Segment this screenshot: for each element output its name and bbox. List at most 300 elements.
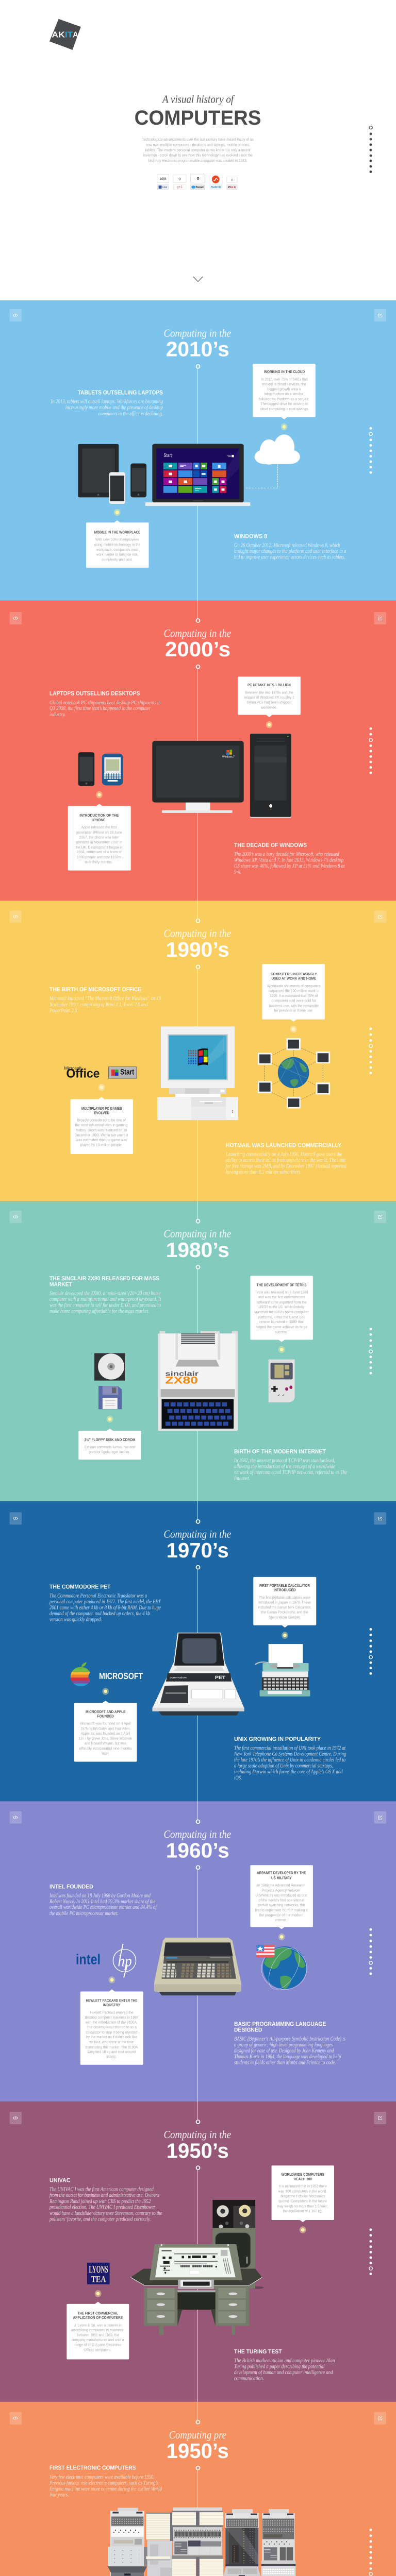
- text: the decade of windows: THE DECADE OF WINDOWS: [234, 842, 307, 848]
- callout: introduction of the iPhone: released in November 2007 in: [76, 840, 122, 844]
- callout: multiplayer pc games: was estimated that the game was: [76, 1138, 127, 1142]
- callout: worldwide computers reach 100: WORLDWIDE COMPUTERS: [282, 2173, 324, 2177]
- hotspot: [98, 1084, 105, 1091]
- button: share: [374, 2412, 386, 2425]
- logo: Akita: IT: [65, 30, 73, 39]
- callout: hewlett packard: The desktop was referred to as a: [87, 2025, 137, 2029]
- button: embed: [10, 612, 22, 624]
- text: basic programming language: a group of generic, high-level programming languages: [234, 2042, 333, 2048]
- nav dots: [369, 2529, 372, 2575]
- nav dots: [369, 727, 372, 774]
- text: first electronic computers: Very few electronic computers were available before 1950.: [50, 2474, 154, 2480]
- social share buttons: 0: [197, 177, 200, 181]
- text: tablets outselling laptops: increasingly more mobile and the presence of desktop: [65, 404, 163, 411]
- callout: hewlett packard: with the introduction of the 9100A.: [85, 2020, 138, 2025]
- logo: Akita: [50, 19, 81, 50]
- illustration: laptop with Windows 8: [145, 444, 250, 506]
- callout: pc uptake: [238, 676, 301, 717]
- timeline marker: [196, 2420, 200, 2424]
- logo: Microsoft: MICROSOFT: [99, 1671, 143, 1681]
- heading: 1960's: Computing in the: [163, 1828, 231, 1840]
- callout: first portable calculator: The first portable calculators were: [259, 1596, 310, 1600]
- callout: hewlett packard: desktop computer business in 1968: [85, 2015, 138, 2020]
- callout: arpanet: ARPANET DEVELOPED BY THE: [257, 1871, 306, 1875]
- panel: 2010s: [0, 300, 396, 601]
- callout: working in the cloud: infrastructure as a service,: [264, 392, 304, 396]
- illustration: tower PC: [250, 734, 291, 818]
- title: A visual history of: [162, 93, 235, 105]
- illustration: Sinclair ZX80: sinclair: [165, 1370, 199, 1378]
- callout: hewlett packard: weighted 18 kg and cost around: [88, 2050, 136, 2054]
- illustration: 90s desktop PC: [157, 1026, 238, 1120]
- callout: worldwide computers reach 100: Magazine Popular Mechanics: [280, 2194, 325, 2198]
- nav dots: [369, 1328, 372, 1375]
- heading: 1980's: 1980’s: [166, 1238, 229, 1262]
- title: COMPUTERS: [135, 106, 261, 129]
- text: the birth of microsoft office: Microsoft launched “The Microsoft Office for Windows” on 19: [50, 995, 161, 1002]
- button: embed: [10, 309, 22, 321]
- text: the sinclair zx80: [50, 1275, 161, 1314]
- hotspot: [290, 1026, 297, 1032]
- callout: working in the cloud: cloud computing is cost savings.: [260, 407, 309, 411]
- logo: Lyons Tea: TEA: [91, 2274, 106, 2284]
- text: tablets outselling laptops: TABLETS OUTSELLING LAPTOPS: [78, 389, 163, 396]
- text: univac: would have a landslide victory over Stevenson, contrary to the: [50, 2210, 162, 2216]
- callout: worldwide computers reach 100: It is estimated that in 1953 there: [279, 2184, 327, 2189]
- callout: pc uptake: billion PCs had been shipped: [247, 700, 291, 705]
- callout: introduction of the iPhone: [68, 804, 131, 871]
- callout: microsoft and apple founded: Apple Inc was founded on 1 April: [81, 1731, 130, 1736]
- illustration: Commodore PET: commodore: [170, 1676, 187, 1679]
- text: first electronic computers: War years.: [50, 2492, 69, 2498]
- illustration: Commodore PET: PET: [215, 1675, 226, 1680]
- callout: first commercial application: introducing computers to business.: [71, 2328, 124, 2332]
- text: the commodore pet: The Commodore Personal Electronic Translator was a: [50, 1592, 147, 1599]
- text: intel founded: Intel was founded on 18 July 1968 by Gordon Moore and: [50, 1892, 151, 1899]
- text: laptops outselling desktops: Q3 2008, the first time that’s happened in the computer: [50, 705, 151, 711]
- callout: working in the cloud: The biggest drive for moving to: [260, 402, 308, 406]
- text: hotmail: HOTMAIL WAS LAUNCHED COMMERCIALLY: [226, 1142, 341, 1148]
- heading: 1950's: 1950’s: [167, 2139, 229, 2162]
- icon: start button: Start: [120, 1067, 134, 1076]
- callout: multiplayer pc games: played by 10 million people.: [80, 1143, 123, 1147]
- text: basic programming language: [234, 2021, 345, 2065]
- callout: microsoft and apple founded: 1975 by Bill Gates and Paul Allen.: [80, 1726, 130, 1731]
- timeline marker: [196, 919, 200, 923]
- button: share: [374, 309, 386, 321]
- callout: floppy disk and cdrom: [78, 1429, 141, 1460]
- panel: pre 1950s: [0, 2402, 396, 2576]
- logo: Apple: [70, 1662, 90, 1687]
- text: basic programming language: designed for ease of use. Designed by John Kemeny and: [234, 2047, 334, 2054]
- intro text: now own multiple computers - desktops and laptops, mobile phones,: [146, 143, 250, 147]
- panel: 1950s: [0, 2102, 396, 2402]
- timeline marker: [196, 2120, 200, 2124]
- callout: the development of tetris: Tetris was released on 6 June 1984: [255, 1290, 308, 1295]
- text: univac: The UNIVAC I was the first American computer designed: [50, 2186, 154, 2192]
- logo: Akita: AK: [52, 30, 65, 39]
- callout: the development of tetris: launched for 1980’s home computer: [254, 1310, 309, 1314]
- text: laptops outselling desktops: [50, 690, 161, 717]
- callout: hewlett packard: an IBM, who were at the time: [89, 2040, 134, 2044]
- heading: 1980's: [163, 1228, 231, 1262]
- callout: mobile in the workplace: [86, 520, 148, 568]
- illustration: laptop with Windows 8: Start: [163, 452, 172, 458]
- text: windows 8: [234, 533, 346, 560]
- callout: arpanet: (ASPANET) was introduced as one: [255, 1893, 307, 1897]
- hotspot: [300, 2226, 306, 2233]
- callout: hewlett packard: INDUSTRY: [103, 2003, 120, 2007]
- callout: multiplayer pc games: MULTIPLAYER PC GAMES: [81, 1106, 122, 1111]
- timeline marker: [196, 365, 200, 368]
- callout: worldwide computers reach 100: REACH 100: [294, 2177, 312, 2181]
- text: the turing test: development of human and computer intelligence and: [234, 2369, 333, 2376]
- logo: Lyons Tea: [87, 2263, 110, 2284]
- callout: worldwide computers reach 100: [272, 2165, 334, 2222]
- text: birth of the modern internet: In 1982, the internet protocol TCP/IP was standardised,: [234, 1458, 335, 1464]
- illustration: Colossus: [108, 2507, 295, 2576]
- title: [135, 93, 261, 129]
- timeline marker: [196, 965, 200, 969]
- timeline marker: [196, 665, 200, 669]
- text: the birth of microsoft office: November 1990, comprising of Word 1.1, Excel 2.0 and: [50, 1001, 148, 1007]
- callout: mobile in the workplace: using mobile technology in the: [94, 543, 140, 547]
- callout: first portable calculator: included the Sanyo Mini Calculator,: [258, 1605, 311, 1609]
- timeline marker: [196, 1219, 200, 1223]
- illustration: HP 9100A calculator: [154, 1938, 241, 1995]
- illustration: globe with US flag: [256, 1945, 307, 1992]
- heading: pre 1950's: [167, 2429, 229, 2463]
- callout: the development of tetris: [250, 1276, 313, 1342]
- callout: the development of tetris: USSR to the US. Whilst initially: [259, 1305, 304, 1309]
- logo: Microsoft Office: Office: [66, 1066, 100, 1080]
- text: unix growing in popularity: iOS.: [234, 1774, 242, 1781]
- text: the turing test: [234, 2348, 335, 2381]
- text: intel founded: overall worldwide PC microprocessor market and 84.4% of: [50, 1904, 157, 1910]
- callout: pc uptake: worldwide.: [261, 705, 277, 709]
- callout: the development of tetris: version launched in 1989 that: [259, 1320, 304, 1324]
- text: the turing test: The British mathematician and computer pioneer Alan: [234, 2357, 335, 2363]
- illustration: floppy disk: [98, 1386, 122, 1409]
- timeline marker: [196, 2166, 200, 2170]
- text: tablets outselling laptops: In 2013, tablets will outsell laptops. Workforces are becoming: [51, 398, 163, 404]
- social share buttons: g+1: [177, 185, 183, 189]
- text: the decade of windows: 9%.: [234, 869, 241, 875]
- text: intel founded: INTEL FOUNDED: [50, 1884, 93, 1890]
- heading: 2000's: Computing in the: [163, 627, 231, 639]
- callout: worldwide computers reach 100: quoted ‘Computers in the future: [278, 2199, 327, 2204]
- callout: working in the cloud: [253, 364, 316, 419]
- callout: hewlett packard: HEWLETT PACKARD ENTER THE: [86, 1998, 137, 2003]
- text: laptops outselling desktops: LAPTOPS OUTSELLING DESKTOPS: [50, 690, 140, 697]
- text: the commodore pet: THE COMMODORE PET: [50, 1584, 111, 1590]
- timeline marker: [196, 1520, 200, 1523]
- hotspot: [107, 1416, 113, 1422]
- text: unix growing in popularity: [234, 1736, 346, 1781]
- heading: 1960's: [163, 1828, 231, 1862]
- social share buttons: Like: [162, 185, 167, 189]
- timeline marker: [196, 1820, 200, 1823]
- text: first electronic computers: Enigma machine were more common during the earlier World: [50, 2486, 162, 2492]
- callout: multiplayer pc games: [71, 1097, 133, 1154]
- text: the commodore pet: 2001 came with either 4 kb or 8 kb of 8-bit RAM. Due to huge: [50, 1604, 161, 1611]
- hotspot: [109, 1976, 115, 1984]
- text: birth of the modern internet: [234, 1448, 348, 1481]
- heading: 1990's: [163, 927, 231, 961]
- text: the birth of microsoft office: [50, 986, 161, 1013]
- nav dots: [369, 1027, 372, 1074]
- heading: 2010's: 2010’s: [166, 337, 229, 361]
- callout: multiplayer pc games: EVOLVED: [94, 1111, 109, 1115]
- text: first electronic computers: FIRST ELECTRONIC COMPUTERS: [50, 2465, 136, 2471]
- hotspot: [281, 423, 287, 430]
- timeline marker: [196, 2466, 200, 2470]
- callout: arpanet: the progenitor of the modern: [259, 1913, 303, 1917]
- callout: microsoft and apple founded: [74, 1701, 137, 1762]
- callout: computers at work and home: [262, 964, 325, 1022]
- callout: introduction of the iPhone: IPHONE: [92, 818, 105, 822]
- callout: pc uptake: Between the mid-1970s and the: [245, 690, 293, 694]
- callout: worldwide computers reach 100: was 100 computers in the world.: [278, 2189, 327, 2193]
- callout: pc uptake: release of Windows XP, roughly 1: [244, 695, 294, 700]
- callout: introduction of the iPhone: 1000 people and cost $150m: [77, 855, 121, 859]
- hotspot: [96, 791, 103, 798]
- callout: computers at work and home: surpassed the 100-million mark in: [269, 989, 319, 993]
- callout: the development of tetris: success.: [275, 1330, 288, 1334]
- callout: microsoft and apple founded: and Ronald Wayne, but was: [85, 1741, 126, 1745]
- text: intel founded: Robert Noyce. In 2011 Intel had 79.3% market share of the: [50, 1899, 155, 1905]
- text: the commodore pet: personal computer produced in 1977. The first model, the PET: [49, 1599, 161, 1605]
- heading: 2010's: Computing in the: [163, 327, 231, 339]
- illustration: network of computers around globe: [258, 1038, 330, 1109]
- callout: computers at work and home: 1999. It is estimated that 75% of: [270, 993, 318, 998]
- panel: 1990s: [0, 901, 396, 1201]
- callout: first commercial application: [67, 2302, 129, 2360]
- callout: multiplayer pc games: Broadly considered to be one of: [77, 1118, 126, 1123]
- callout: mobile in the workplace: work harder to balance risk,: [96, 552, 138, 556]
- nav dots: [369, 1928, 372, 1975]
- illustration: LEO console: [130, 2200, 264, 2335]
- callout: first commercial application: THE FIRST COMMERCIAL: [77, 2311, 118, 2315]
- text: tablets outselling laptops: [51, 389, 163, 416]
- callout: multiplayer pc games: history. Doom was released on 10: [76, 1128, 127, 1132]
- callout: arpanet: of the world’s first operational: [259, 1898, 304, 1902]
- callout: arpanet: In 1969 the Advanced Research: [257, 1883, 305, 1887]
- callout: arpanet: first to implement TCP/IP making it: [255, 1908, 308, 1912]
- heading: 1970's: 1970’s: [167, 1538, 229, 1562]
- nav dots: [369, 2228, 372, 2275]
- callout: arpanet: [250, 1865, 313, 1929]
- illustration: Game Boy: [269, 1360, 295, 1402]
- callout: worldwide computers reach 100: the equivalent of 1,360 kg.: [283, 2209, 322, 2213]
- button: embed: [10, 1811, 22, 1824]
- heading: 1970's: Computing in the: [163, 1528, 231, 1540]
- social share buttons: [157, 174, 237, 190]
- callout: introduction of the iPhone: the UK. Development began in: [75, 845, 123, 850]
- panel: 1970s: [0, 1501, 396, 1802]
- text: birth of the modern internet: Internet.: [234, 1475, 250, 1481]
- callout: introduction of the iPhone: generation iPhone on 29 June: [76, 830, 122, 835]
- heading: 1950's: Computing in the: [163, 2128, 231, 2141]
- hotspot: [278, 1346, 285, 1353]
- text: unix growing in popularity: UNIX GROWING IN POPULARITY: [234, 1736, 321, 1742]
- heading: pre 1950's: Computing pre: [169, 2429, 226, 2441]
- hotspot: [282, 1632, 288, 1639]
- callout: microsoft and apple founded: Microsoft was founded on 4 April: [80, 1721, 131, 1726]
- heading: 1980's: Computing in the: [163, 1228, 231, 1240]
- timeline marker: [196, 1866, 200, 1869]
- callout: mobile in the workplace: workplace, companies must: [96, 548, 139, 552]
- intro text: Technological advancements over the last century have meant many of us: [142, 138, 254, 142]
- text: the turing test: Turing published a paper describing the potential: [234, 2363, 324, 2369]
- heading: 2010's: [163, 327, 231, 361]
- text: the sinclair zx80: THE SINCLAIR ZX80 RELEASED FOR MASS: [50, 1275, 159, 1282]
- nav dots: [369, 1628, 372, 1675]
- callout: first portable calculator: INTRODUCED: [273, 1588, 296, 1592]
- text: hotmail: having more than 8.5 million subscribers.: [226, 1169, 301, 1175]
- button: embed: [10, 2412, 22, 2425]
- social share buttons: 109k: [160, 177, 167, 181]
- text: laptops outselling desktops: industry.: [50, 711, 65, 717]
- text: the commodore pet: version was quickly dropped.: [50, 1616, 102, 1622]
- callout: computers at work and home: business use, with the remainder: [269, 1004, 319, 1008]
- hotspot: [278, 1934, 285, 1940]
- text: windows 8: WINDOWS 8: [234, 533, 267, 539]
- callout: the development of tetris: platforms, it was the Game Boy: [258, 1315, 305, 1319]
- social share buttons: Submit: [211, 185, 221, 188]
- heading: 2000's: [163, 627, 231, 661]
- callout: multiplayer pc games: the most influential titles in gaming: [75, 1123, 127, 1127]
- button: embed: [10, 2112, 22, 2124]
- callout: computers at work and home: Worldwide shipments of computers: [267, 984, 321, 988]
- timeline marker: [196, 1566, 200, 1569]
- callout: introduction of the iPhone: Apple released the first: [81, 825, 117, 829]
- illustration: Commodore PET: [152, 1633, 244, 1716]
- callout: microsoft and apple founded: later.: [102, 1751, 109, 1755]
- icon: cloud: [244, 434, 300, 488]
- callout: computers at work and home: USED AT WORK AND HOME: [272, 976, 316, 981]
- text: univac: presidential election. The UNIVAC I predicted Eisenhower: [49, 2204, 155, 2210]
- callout: working in the cloud: moved to cloud services, the: [262, 382, 306, 386]
- callout: arpanet: internet.: [275, 1918, 287, 1922]
- callout: hewlett packard: $5000.: [106, 2055, 117, 2059]
- hotspot: [114, 509, 121, 516]
- callout: floppy disk and cdrom: porttitor ligula, eget lacinia.: [89, 1450, 130, 1454]
- text: the birth of microsoft office: THE BIRTH OF MICROSOFT OFFICE: [50, 986, 141, 993]
- callout: computers at work and home: COMPUTERS INCREASINGLY: [271, 972, 317, 976]
- heading: 1990's: Computing in the: [163, 927, 231, 939]
- button: embed: [10, 1211, 22, 1223]
- callout: first commercial application: Between 1951 and 1963, the: [76, 2333, 119, 2337]
- callout: first portable calculator: introduced in Japan in 1970. These: [258, 1600, 311, 1604]
- text: intel founded: the mobile PC microprocessor market.: [50, 1910, 119, 1917]
- callout: floppy disk and cdrom: 3½” FLOPPY DISK AND CDROM: [85, 1438, 136, 1442]
- text: unix growing in popularity: a large scale adoption of Unix by commercial startups,: [234, 1762, 333, 1769]
- timeline marker: [196, 619, 200, 622]
- callout: first portable calculator: Sharp Micro Compet.: [269, 1615, 301, 1619]
- intro text: first truly electronic programmable computer was created in 1943.: [148, 158, 248, 163]
- text: the commodore pet: [49, 1584, 161, 1622]
- callout: hewlett packard: by the market as it didn’t look like: [86, 2035, 137, 2039]
- callout: first commercial application: J. Lyons & Co. was a pioneer in: [74, 2323, 122, 2327]
- text: the sinclair zx80: computer with a multifunctional and waterproof keyboard. It: [50, 1296, 161, 1302]
- social share buttons: Pin it: [228, 185, 236, 189]
- panel: 1960s: [0, 1801, 396, 2102]
- text: univac: Remington Rand joined up with CBS to predict the 1952: [50, 2198, 151, 2204]
- text: basic programming language: DESIGNED: [234, 2027, 262, 2033]
- panel: intro header: [50, 19, 372, 281]
- callout: the development of tetris: and was the first entertainment: [258, 1295, 305, 1299]
- hotspot: [102, 1688, 109, 1695]
- heading: 2000's: 2000’s: [165, 637, 230, 661]
- illustration: BlackBerry: [102, 754, 123, 785]
- arrow: scroll down: [193, 277, 203, 281]
- callout: first commercial application: APPLICATION OF COMPUTERS: [73, 2316, 123, 2320]
- callout: mobile in the workplace: MOBILE IN THE WORKPLACE: [94, 530, 140, 535]
- text: tablets outselling laptops: computers in the office is declining.: [98, 410, 163, 416]
- button: share: [374, 1512, 386, 1524]
- timeline marker: [196, 1265, 200, 1269]
- illustration: desktop monitor: Windows 7: [222, 755, 235, 758]
- button: embed: [10, 910, 22, 923]
- text: first electronic computers: Previous famous non-electronic computers, such as Turing’s: [50, 2480, 158, 2486]
- text: univac: [49, 2177, 162, 2222]
- text: univac: from the outset for business and administrative use. Owners: [50, 2192, 159, 2198]
- heading: 1950's: [163, 2128, 231, 2162]
- illustration: tablet: [78, 444, 119, 497]
- text: the sinclair zx80: MARKET: [50, 1281, 72, 1287]
- text: the birth of microsoft office: PowerPoint 2.0.: [50, 1007, 78, 1013]
- heading: pre 1950's: 1950’s: [167, 2439, 229, 2463]
- text: hotmail: [226, 1142, 346, 1175]
- text: laptops outselling desktops: Global notebook PC shipments beat desktop PC shipments in: [50, 699, 161, 705]
- callout: mobile in the workplace: With over 50% of employees: [95, 537, 139, 542]
- callout: computers at work and home: for personal or home use.: [274, 1008, 313, 1013]
- button: share: [374, 1811, 386, 1824]
- button: share: [374, 2112, 386, 2124]
- callout: microsoft and apple founded: MICROSOFT AND APPLE: [86, 1710, 125, 1714]
- text: intel founded: [50, 1884, 157, 1917]
- illustration: CD-ROM: [94, 1353, 125, 1381]
- callout: introduction of the iPhone: 2007, the phone was later: [79, 835, 119, 839]
- panel: 2000s: [0, 600, 396, 901]
- callout: the development of tetris: software to be exported from the: [257, 1300, 307, 1304]
- intro text: tablets. The modern personal computer as we know it is only a recent: [145, 148, 251, 152]
- text: birth of the modern internet: BIRTH OF THE MODERN INTERNET: [234, 1448, 326, 1455]
- panel: 1950s: LYONS: [89, 2264, 108, 2275]
- callout: first commercial application: range of LEO (Lyons Electronic: [74, 2343, 121, 2347]
- text: basic programming language: students in fields other than Maths and Science to code.: [234, 2059, 336, 2065]
- callout: arpanet: Projects Agency Network: [262, 1888, 300, 1892]
- callout: hewlett packard: Hewlett Packard entered the: [90, 2010, 134, 2014]
- callout: pc uptake: PC UPTAKE HITS 1 BILLION: [248, 683, 291, 687]
- callout: working in the cloud: In 2012, over 75% of SMEs had: [261, 377, 308, 381]
- callout: multiplayer pc games: December 1993. Within two years it: [75, 1133, 128, 1137]
- text: first electronic computers: [50, 2465, 162, 2498]
- callout: computers at work and home: computers sold were sold for: [272, 998, 316, 1003]
- button: share: [374, 612, 386, 624]
- text: univac: UNIVAC: [50, 2177, 71, 2183]
- heading: 1960's: 1960’s: [166, 1839, 229, 1862]
- callout: first commercial application: company manufactured and sold a: [72, 2338, 124, 2342]
- text: the decade of windows: [234, 842, 345, 875]
- callout: the development of tetris: THE DEVELOPMENT OF TETRIS: [257, 1283, 307, 1287]
- text: the sinclair zx80: was the first computer to sell for under £100, and promised to: [50, 1302, 161, 1308]
- callout: first commercial application: Office) computers.: [84, 2348, 111, 2352]
- callout: hewlett packard: calculator to stop it being rejected: [86, 2030, 137, 2035]
- text: the sinclair zx80: Sinclair developed the ZX80, a ‘mini-sized’ (20×20 cm) home: [50, 1290, 161, 1296]
- nav dots: [369, 427, 372, 474]
